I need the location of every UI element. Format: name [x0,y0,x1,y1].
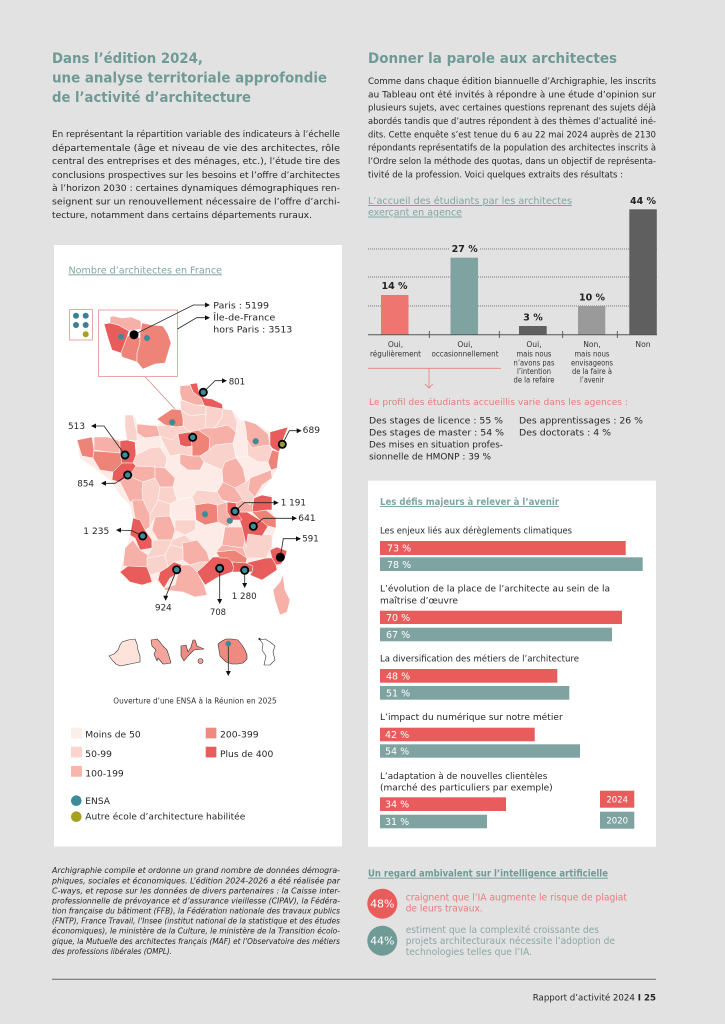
stat: 44 %: technologies telles que l’IA. [406,947,532,958]
bar category labels: n’avons pas [514,359,555,368]
text block: note méthodologique: économiques), le ministère de la Culture, le ministère de la Transition écolo- [52,926,340,936]
map labels: nombres d'architectes: 689 [303,426,320,436]
legend: classes d'architectes: 100-199 [85,770,124,780]
text block: profil des étudiants: Des apprentissages : 26 % [519,417,643,427]
bar category labels: Non, [583,340,601,349]
bar category labels: de la refaire [514,376,555,385]
bar category labels: Oui, [457,340,473,349]
group: dérèglements climatiques: 78 % [387,560,411,571]
legend: classes d'architectes: Autre école d’architecture habilitée [85,811,246,822]
map: France départements [77,383,290,615]
group: place de l'architecte: L’évolution de la place de l’architecte au sein de la [380,584,610,595]
legend: 2024 / 2020: 2020 [606,816,628,826]
text block: introduction: seignent sur un renouvellement nécessaire de l’offre d’archi- [52,196,340,208]
panel: défis majeurs [368,481,656,847]
chart: accueil des étudiants [368,195,657,385]
panel: carte des architectes [54,245,342,846]
group: nouvelles clientèles: L’adaptation à de nouvelles clientèles [380,771,548,782]
group: diversification: 48 % [386,671,410,682]
stat: 44 %: estiment que la complexité croissante des [406,925,599,936]
text block: introduction: à l’horizon 2030 : certaines dynamiques démographiques ren- [52,183,340,194]
legend: classes d'architectes: 50-99 [85,750,112,760]
text block: profil des étudiants: Des doctorats : 4 % [519,428,611,438]
bar category labels: l’avenir [580,376,605,385]
bar values: 44 % [630,196,657,207]
group: diversification: La diversification des métiers de l’architecture [380,654,579,665]
group: diversification [380,654,579,700]
legend: classes d'architectes: Plus de 400 [220,750,274,760]
legend: classes d'architectes [71,728,274,822]
text block: note méthodologique [51,865,341,956]
chart title: L’accueil des étudiants par les architectes [368,195,572,207]
text block: enquête [368,76,656,180]
bar: non 44 % [629,209,657,335]
map labels: nombres d'architectes: 591 [302,534,319,544]
chart title: exerçant en agence [368,208,462,218]
heading: analyse territoriale: de l’activité d’architecture [52,90,251,106]
heading: donner la parole: Donner la parole aux architectes [368,51,617,67]
bar values: 10 % [579,293,606,304]
connector: Île-de-France zoom [145,377,193,436]
map labels: nombres d'architectes: 801 [229,378,245,388]
group: place de l'architecte: 70 % [386,613,410,624]
bar: oui occasionnellement 27 % [450,258,478,335]
text block: note méthodologique: (FNTP), France Travail, l’Insee (institut national de la statistique et des études [52,916,340,926]
text block: note méthodologique: tion française du bâtiment (FFB), la Fédération nationale des travaux publics [52,906,340,916]
text block: introduction: départementale (âge et niveau de vie des architectes, rôle [52,143,341,154]
group: dérèglements climatiques: 73 % [387,544,411,554]
map: Île-de-France inset [98,310,178,376]
footer: page number: Rapport d’activité 2024 I 25 [533,993,656,1004]
stat: 48 %: 48% [370,898,395,911]
legend: 2024 / 2020: 2024 [606,796,628,806]
bar category labels: l’intention [517,367,551,376]
group: numérique: 54 % [385,746,409,758]
text block: note méthodologique: Archigraphie compile et ordonne un grand nombre de données démogra- [51,865,340,875]
bar: oui régulièrement 14 % [381,295,408,335]
bar category labels: occasionnellement [432,350,499,359]
group: numérique [380,712,580,758]
map labels: nombres d'architectes: 1 191 [281,498,306,508]
bar: oui sans intention 3 % [519,326,547,335]
icon: La Réunion ENSA leader [226,641,231,675]
text block: profil des étudiants: Des stages de licence : 55 % [369,417,503,427]
legend: inset dots box [70,310,92,340]
stat: 44 % [367,925,615,958]
text block: enquête: au Tableau ont été invités à répondre à une étude d’opinion sur [368,89,656,100]
group: nouvelles clientèles: 34 % [385,800,409,811]
text block: profil des étudiants: Des mises en situation profes- [369,440,503,450]
map labels: nombres d'architectes: 854 [77,480,94,490]
group: dérèglements climatiques: Les enjeux liés aux dérèglements climatiques [380,526,572,537]
bar category labels: Oui, [388,340,403,349]
text block: enquête: l’Ordre selon la méthode des quotas, dans un objectif de représenta- [368,156,656,167]
caption: ENSA à la Réunion: Ouverture d’une ENSA à la Réunion en 2025 [113,697,277,706]
stat: 48 %: de leurs travaux. [406,903,483,914]
text block: introduction: En représentant la répartition variable des indicateurs à l’échelle [52,129,340,140]
group: place de l'architecte [380,584,622,641]
text block: enquête: dits. Cette enquête s’est tenue du 6 au 22 mai 2024 auprès de 2130 [368,129,656,140]
group: place de l'architecte: maîtrise d’œuvre [380,596,458,606]
stat: 44 %: projets architecturaux nécessite l’adoption de [406,936,615,947]
group: diversification: 51 % [386,688,410,699]
bar category labels: Non [635,340,651,349]
map labels: nombres d'architectes [68,301,320,618]
text block: introduction: conclusions prospectives sur les besoins et l’offre d’architectes [52,171,340,181]
bar category labels: de la faire à [572,367,612,376]
bar: non envisageons 10 % [578,306,605,335]
text block: note méthodologique: gique, la Mutuelle des architectes français (MAF) et l’Observatoire des métiers [52,936,340,946]
stat: 44 %: 44% [370,935,395,948]
bar values: 14 % [381,281,408,292]
map labels: nombres d'architectes: Paris : 5199 [213,301,269,311]
group: nouvelles clientèles [380,771,553,828]
bar values: 3 % [523,313,543,324]
bar category labels [370,340,651,385]
legend: 2024 / 2020 [600,791,634,829]
text block: profil des étudiants [369,397,643,463]
stat: 48 % [367,889,627,919]
bar values: 27 % [452,244,478,255]
chart title [368,195,572,218]
group: nouvelles clientèles: (marché des particuliers par exemple) [380,782,553,793]
arrow: vers le profil des étudiants [368,368,501,388]
bar category labels: envisageons [571,359,613,368]
heading: analyse territoriale: Dans l’édition 2024, [52,51,203,67]
bar category labels: mais nous [574,350,610,359]
text block: note méthodologique: professionnelle de prévoyance et d’assurance vieillesse (CIPAV), la Fédéra- [51,896,340,906]
legend: classes d'architectes: ENSA [85,797,111,807]
group: numérique: 42 % [385,730,409,741]
text block: profil des étudiants: Des stages de master : 54 % [369,428,504,438]
text block: enquête: Comme dans chaque édition biannuelle d’Archigraphie, les inscrits [368,76,656,87]
panel title: Les défis majeurs à relever à l’avenir [380,497,559,508]
text block: enquête: répondants représentatifs de la population des architectes inscrits à [368,143,656,154]
text block: introduction: central des entreprises et des ménages, etc.), l’étude tire des [52,156,340,167]
text block: note méthodologique: C-ways, et repose sur les données de divers partenaires : la Caisse inter- [52,886,340,896]
text block: profil des étudiants: Le profil des étudiants accueillis varie dans les agences : [369,397,628,408]
bar values [381,196,657,324]
group: place de l'architecte: 67 % [386,630,410,641]
bar category labels: Oui, [526,340,542,349]
group: dérèglements climatiques [380,526,643,571]
heading: analyse territoriale: une analyse territoriale approfondie [52,70,327,86]
text block: enquête: tivité de la profession. Voici quelques extraits des résultats : [368,169,623,180]
map labels: nombres d'architectes: Île-de-France [212,312,276,324]
section title: Un regard ambivalent sur l’intelligence artificielle [368,869,608,880]
map labels: nombres d'architectes: 513 [68,422,85,432]
map: outre-mer [109,638,275,666]
group: nouvelles clientèles: 31 % [385,817,409,828]
text block: note méthodologique: des professions libérales (OMPL). [52,946,172,956]
map labels: nombres d'architectes: 708 [210,608,226,618]
group: numérique: L’impact du numérique sur notre métier [380,712,563,723]
text block: profil des étudiants: sionnelle de HMONP : 39 % [369,453,491,463]
text block: enquête: abordés tandis que d’autres répondent à des thèmes d’actualité iné- [368,116,656,127]
map labels: nombres d'architectes: 1 280 [232,592,257,602]
bar category labels: mais nous [516,350,552,359]
map: écoles (ENSA) points [118,330,286,574]
text block: introduction: tecture, notamment dans certains départements ruraux. [52,210,312,221]
section: intelligence artificielle [367,869,627,958]
text block: introduction [52,129,341,221]
map labels: nombres d'architectes: 641 [298,514,316,524]
legend: classes d'architectes: 200-399 [220,731,259,741]
text block: note méthodologique: phiques, sociales et économiques. L’édition 2024-2026 a été réalisée par [51,876,341,886]
map labels: nombres d'architectes: 1 235 [83,527,109,537]
map title: Nombre d’architectes en France [68,265,222,276]
stat: 48 %: craignent que l’IA augmente le risque de plagiat [406,892,627,903]
legend: classes d'architectes: Moins de 50 [85,731,141,741]
map labels: nombres d'architectes: 924 [155,604,172,614]
bar category labels: régulièrement [370,350,421,359]
text block: enquête: plusieurs sujets, avec certaines questions reprenant des sujets déjà [368,103,656,114]
leader lines: chiffres par ville [92,305,301,603]
heading: analyse territoriale [52,51,327,106]
map labels: nombres d'architectes: hors Paris : 3513 [213,325,292,335]
